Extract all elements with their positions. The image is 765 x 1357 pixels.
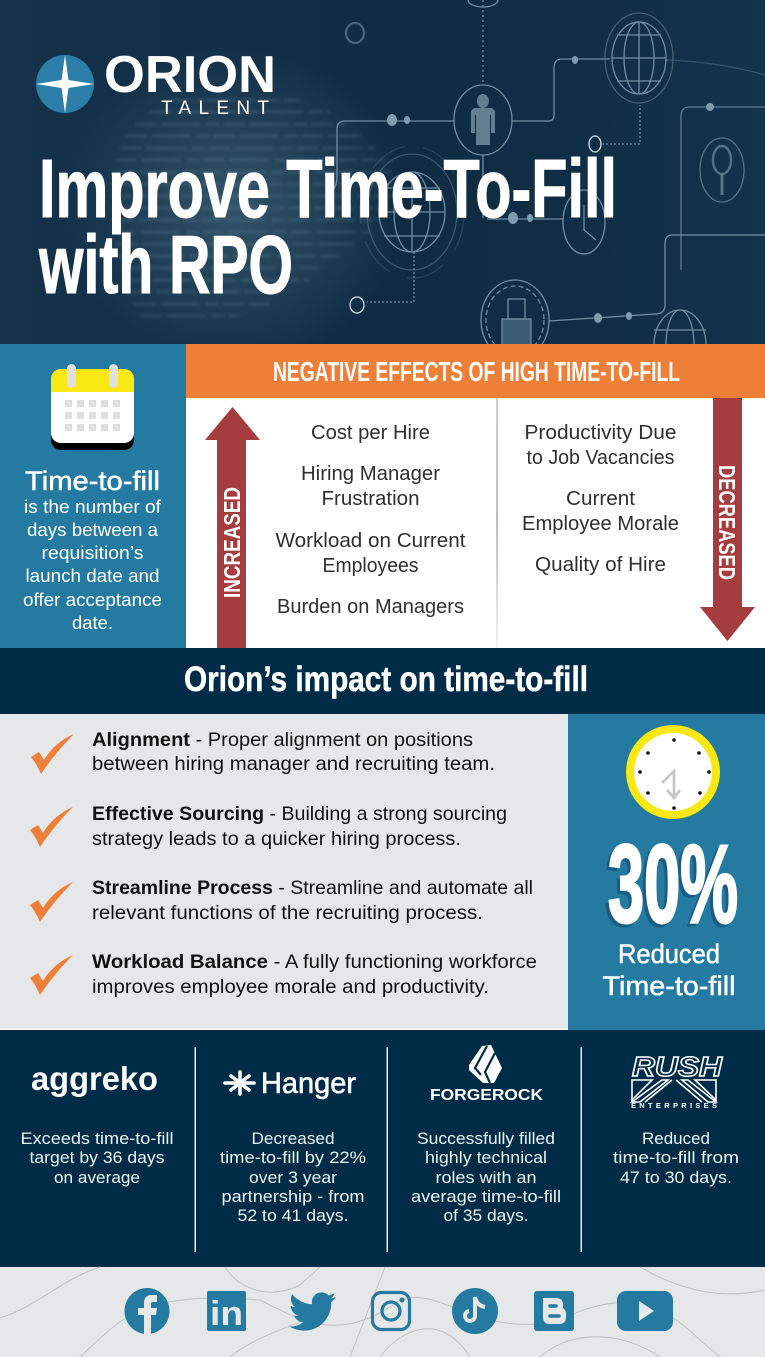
icon: TikTok — [452, 1288, 498, 1334]
client: ForgeRock: of 35 days. — [444, 1206, 528, 1225]
client: aggreko: Exceeds time-to-fill — [20, 1129, 174, 1148]
client: aggreko — [20, 1060, 174, 1187]
client: ForgeRock: highly technical — [425, 1148, 547, 1167]
client: Rush Enterprises — [613, 1051, 739, 1187]
arrow: increased — [205, 407, 260, 648]
item: streamline process: relevant functions of the recruiting process. — [92, 902, 483, 924]
client: Rush Enterprises: Reduced — [642, 1129, 710, 1148]
client: Rush Enterprises: ENTERPRISES — [631, 1101, 717, 1110]
client: Rush Enterprises: time-to-fill from — [613, 1148, 739, 1167]
logo: Orion Talent: TALENT — [161, 98, 269, 119]
item: streamline process: Streamline Process - Streamline and automate all — [92, 877, 533, 899]
icon: Instagram — [372, 1292, 410, 1330]
item: alignment: Alignment - Proper alignment on positions — [92, 729, 473, 751]
item: workload balance — [30, 951, 537, 998]
list: decreased effects: Productivity Due — [524, 422, 676, 444]
item: effective sourcing — [30, 803, 507, 850]
client: Hanger: Hanger — [261, 1067, 356, 1100]
list: increased effects — [276, 422, 466, 618]
arrow: increased: INCREASED — [219, 487, 245, 598]
client: ForgeRock: Successfully filled — [417, 1129, 555, 1148]
definition text: requisition’s — [42, 543, 144, 563]
list: decreased effects: Current — [566, 488, 635, 510]
icon: person — [471, 94, 495, 145]
list: decreased effects: Employee Morale — [522, 513, 679, 535]
client: Hanger: partnership - from — [222, 1187, 364, 1206]
client: ForgeRock: average time-to-fill — [411, 1187, 561, 1206]
client: aggreko: target by 36 days — [30, 1148, 164, 1167]
arrow: decreased — [700, 398, 755, 641]
client: ForgeRock: FORGEROCK — [430, 1087, 543, 1104]
item: alignment — [31, 729, 495, 775]
list: increased effects: Workload on Current — [276, 530, 466, 552]
panel: Orion impact heading — [0, 648, 765, 714]
stat label — [602, 939, 736, 1001]
icon: Facebook — [124, 1288, 170, 1334]
item: effective sourcing: Effective Sourcing - Building a strong sourcing — [92, 803, 507, 825]
client: Rush Enterprises: 47 to 30 days. — [620, 1168, 732, 1187]
stat label: Reduced — [618, 939, 720, 969]
list: decreased effects: Quality of Hire — [535, 554, 666, 576]
logo: Orion Talent — [36, 46, 276, 119]
panel: Orion impact heading: Orion’s impact on time-to-fill — [184, 660, 588, 699]
definition text: launch date and — [26, 566, 160, 586]
item: workload balance: improves employee morale and productivity. — [92, 976, 489, 998]
heading: Time-to-fill: Time-to-fill — [25, 466, 160, 496]
icon: Blogger — [534, 1291, 574, 1331]
definition text — [23, 497, 162, 633]
list: decreased effects — [522, 422, 679, 576]
list: increased effects: Burden on Managers — [277, 596, 464, 618]
client: ForgeRock — [411, 1045, 561, 1225]
client: aggreko: aggreko — [31, 1060, 158, 1097]
logo: Orion Talent: ORION — [104, 46, 276, 104]
title — [38, 142, 617, 311]
list: increased effects: Frustration — [322, 488, 420, 510]
panel: negative effects — [186, 344, 765, 648]
list: increased effects: Hiring Manager — [301, 463, 440, 485]
client: Hanger: 52 to 41 days. — [238, 1206, 348, 1225]
definition text: is the number of — [24, 497, 162, 517]
icon: LinkedIn: in — [210, 1295, 243, 1333]
item: alignment: between hiring manager and recruiting team. — [92, 753, 495, 775]
item: streamline process — [30, 877, 533, 924]
client: ForgeRock: roles with an — [436, 1168, 536, 1187]
panel: 30 percent stat — [568, 714, 765, 1030]
list: increased effects: Employees — [322, 555, 418, 577]
icon: calendar — [51, 364, 134, 450]
list: decreased effects: to Job Vacancies — [526, 447, 674, 469]
icon: YouTube — [617, 1291, 673, 1331]
list: increased effects: Cost per Hire — [311, 422, 430, 444]
client: Hanger: over 3 year — [249, 1168, 337, 1187]
panel: social footer — [0, 1267, 765, 1357]
icon: clock — [626, 725, 720, 819]
icon: Twitter — [289, 1292, 336, 1331]
client: Rush Enterprises: RUSH — [632, 1051, 723, 1082]
definition text: days between a — [27, 520, 159, 540]
client: Hanger: Decreased — [252, 1129, 334, 1148]
panel: impact checklist — [0, 714, 568, 1029]
panel: hero header — [0, 0, 765, 380]
client: Hanger — [220, 1067, 366, 1225]
title: with RPO — [38, 218, 293, 311]
arrow: decreased: DECREASED — [714, 465, 740, 580]
client: Hanger: time-to-fill by 22% — [220, 1148, 366, 1167]
definition text: date. — [72, 613, 113, 633]
client: aggreko: on average — [54, 1168, 140, 1187]
panel: time-to-fill definition — [0, 344, 186, 648]
stat label: Time-to-fill — [602, 971, 736, 1001]
panel: client results — [0, 1030, 765, 1267]
item: effective sourcing: strategy leads to a quicker hiring process. — [92, 828, 461, 850]
item: workload balance: Workload Balance - A fully functioning workforce — [92, 951, 537, 973]
definition text: offer acceptance — [23, 590, 162, 610]
